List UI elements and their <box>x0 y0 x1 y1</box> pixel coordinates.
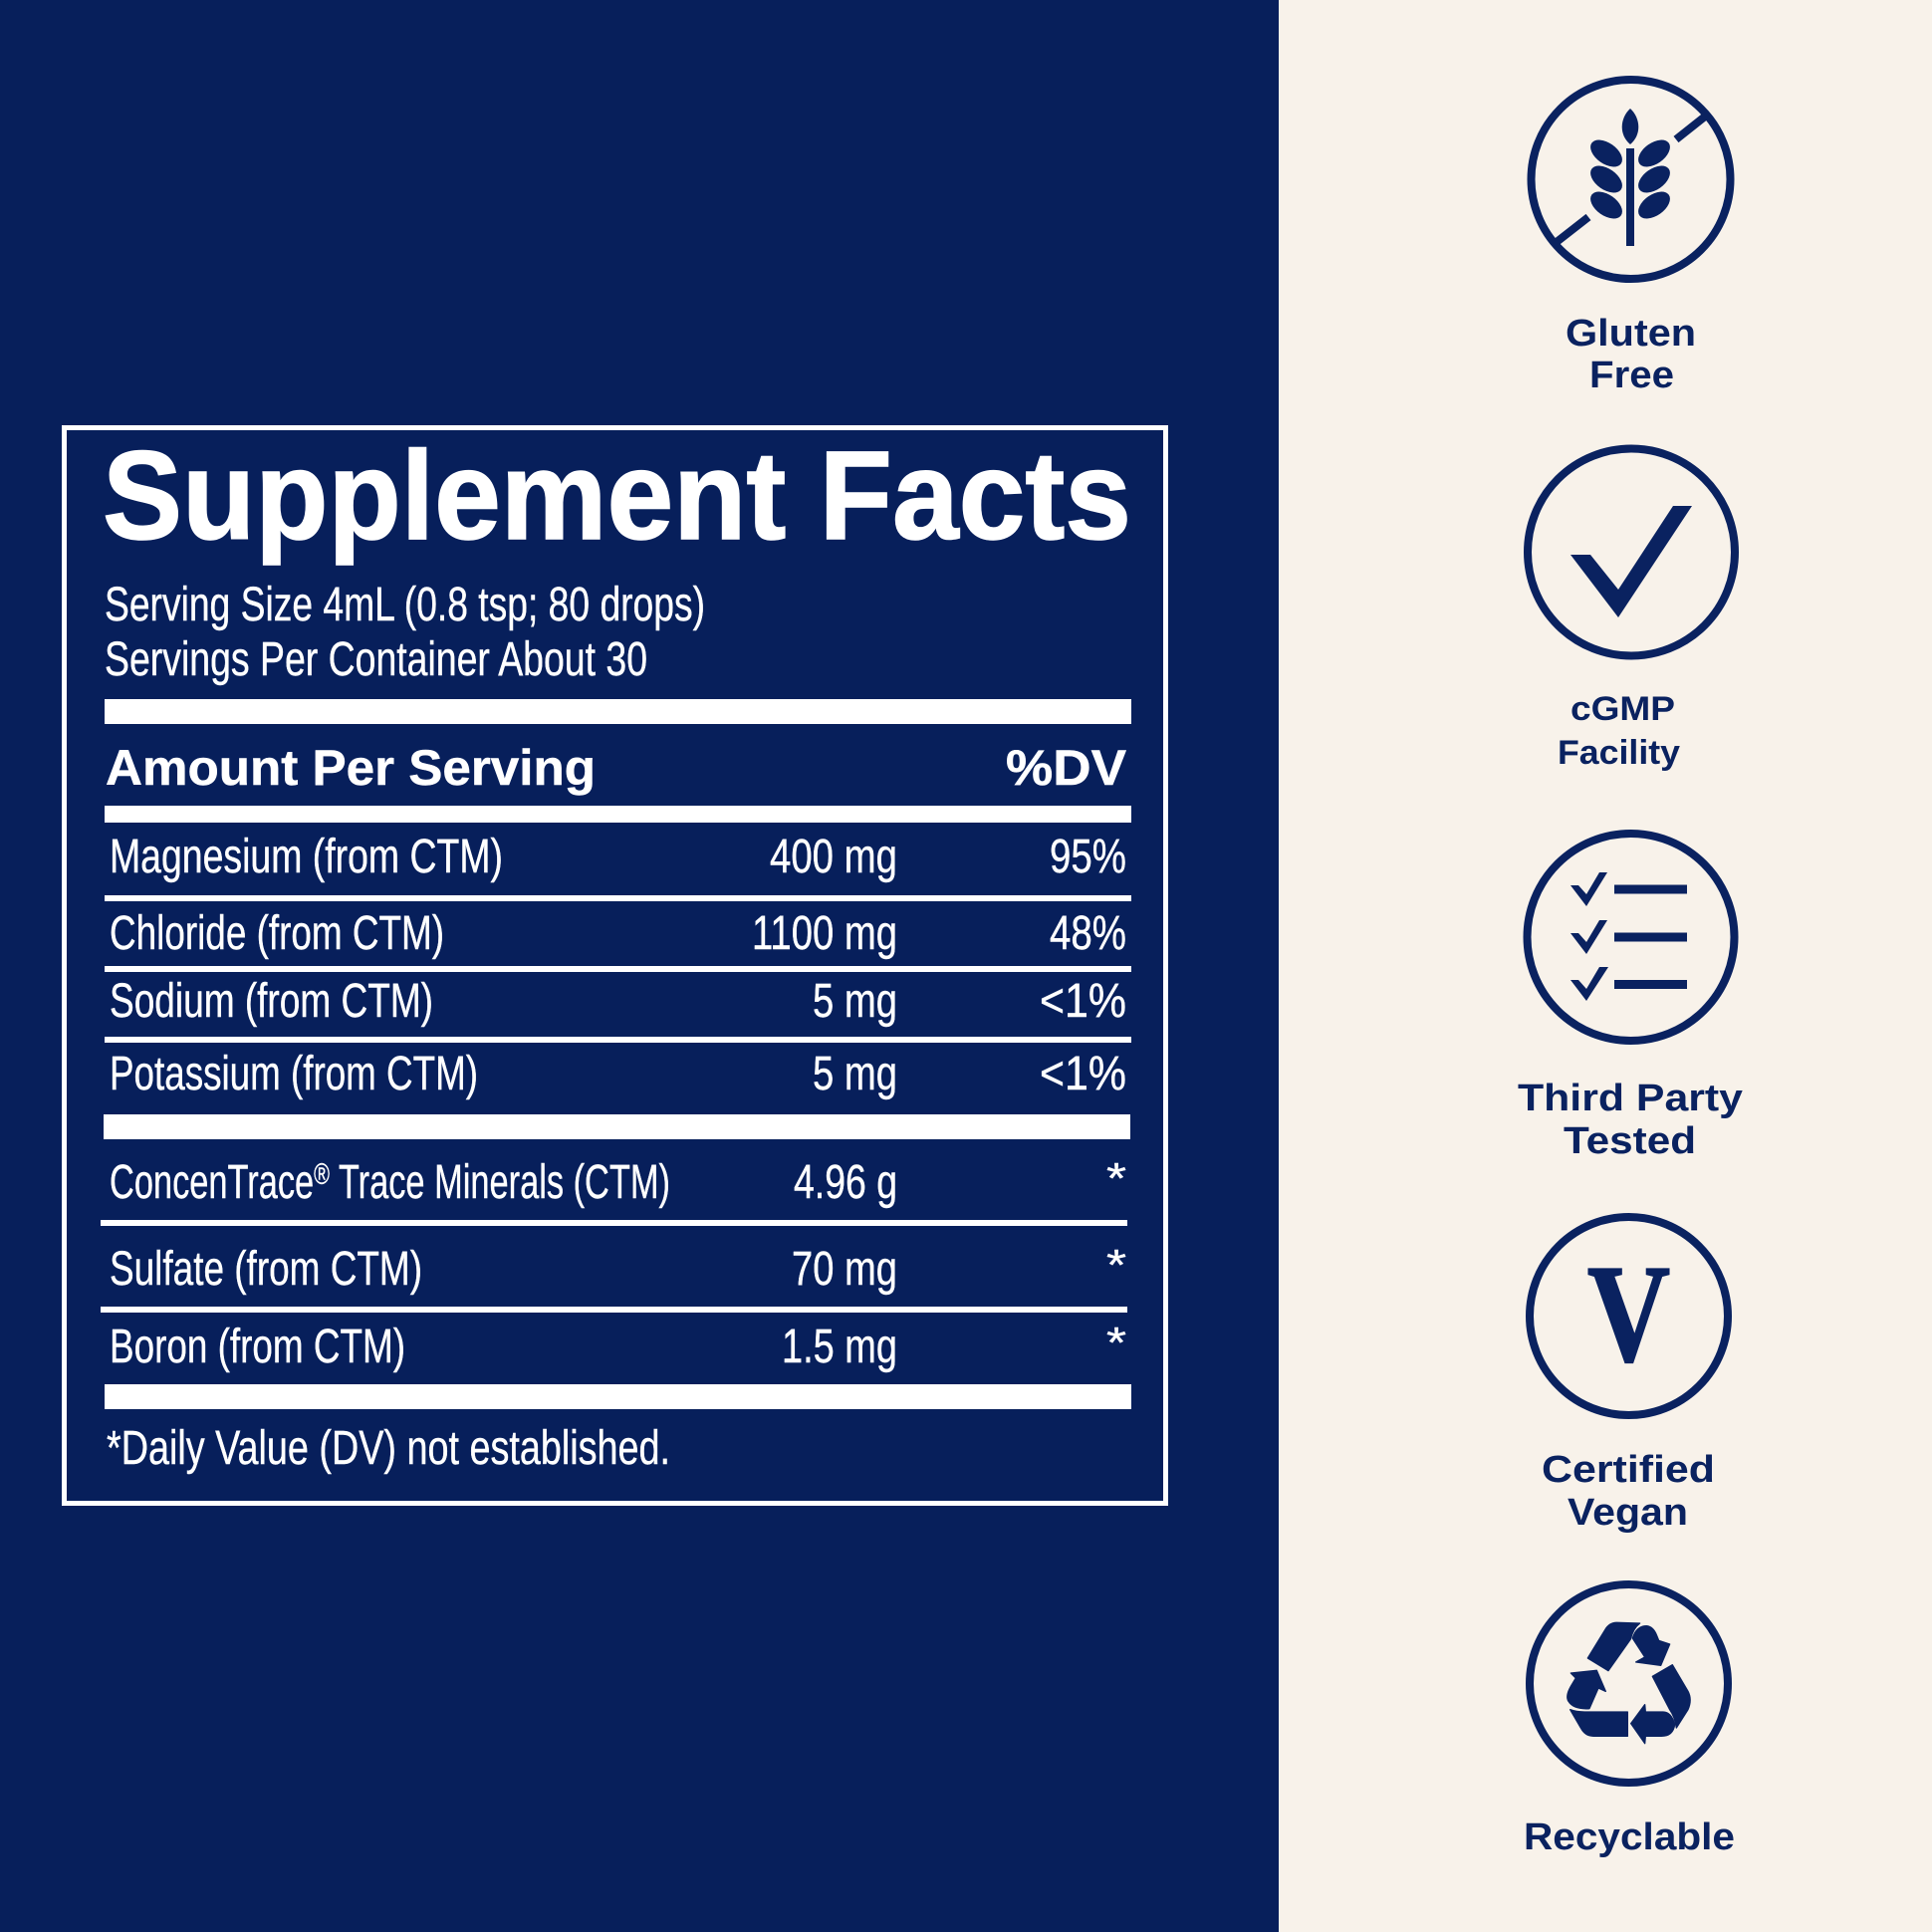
row: Potassium: <1% <box>1040 1048 1126 1100</box>
label: cGMP Facility <box>1558 690 1680 772</box>
row: ConcenTrace: * <box>1106 1154 1126 1203</box>
label: Recyclable: Recyclable <box>1524 1816 1735 1858</box>
panel: navy background <box>0 0 1279 1932</box>
column headings: %DV <box>1006 740 1127 796</box>
row: Magnesium: 400 mg <box>770 831 897 883</box>
icon: recycling arrows <box>1530 1584 1728 1783</box>
row: Boron: Boron (from CTM) <box>110 1321 405 1373</box>
thick rule <box>105 699 1131 724</box>
icon: serif V: V <box>1587 1237 1670 1391</box>
row: Magnesium: 95% <box>1050 831 1126 883</box>
column headings <box>106 740 1127 796</box>
row: ConcenTrace: 4.96 g <box>794 1156 897 1209</box>
label: Certified Vegan: Vegan <box>1568 1492 1688 1534</box>
icon: checklist <box>1528 834 1735 1041</box>
icon: serif V <box>1530 1217 1728 1415</box>
label: Third Party Tested: Tested <box>1564 1120 1696 1162</box>
row: Chloride: 48% <box>1050 907 1126 960</box>
label: Gluten Free: Free <box>1589 355 1674 396</box>
row: Sodium <box>110 975 1126 1028</box>
badge: gluten free <box>1532 80 1731 396</box>
row: ConcenTrace: ® <box>314 1158 330 1191</box>
row: ConcenTrace: ConcenTrace <box>110 1156 394 1209</box>
row: Sulfate: Sulfate (from CTM) <box>110 1243 422 1296</box>
label: Gluten Free: Gluten <box>1566 313 1696 355</box>
badge: third party tested <box>1518 834 1743 1162</box>
row: Boron <box>110 1319 1126 1373</box>
label: Gluten Free <box>1566 313 1696 396</box>
row: Chloride: Chloride (from CTM) <box>110 907 444 960</box>
label: cGMP Facility: cGMP <box>1570 690 1675 728</box>
thick rule <box>104 1114 1130 1139</box>
row: ConcenTrace <box>110 1154 1126 1209</box>
row: Boron: * <box>1106 1319 1126 1367</box>
panel: cream background <box>1278 0 1932 1932</box>
label frame <box>64 428 1165 1504</box>
row: Magnesium <box>110 831 1126 883</box>
heading: Supplement Facts: Supplement Facts <box>103 425 1131 566</box>
footnote: *Daily Value (DV) not established. <box>107 1422 670 1475</box>
label: cGMP Facility: Facility <box>1558 734 1680 772</box>
row: Sodium: 5 mg <box>813 975 897 1028</box>
column headings: Amount Per Serving <box>106 740 596 796</box>
label: Certified Vegan: Certified <box>1542 1449 1715 1491</box>
row: Sodium: Sodium (from CTM) <box>110 975 433 1028</box>
row: Sodium: <1% <box>1040 975 1126 1028</box>
thick rule <box>105 1384 1131 1409</box>
row: Chloride: 1100 mg <box>752 907 897 960</box>
row: Magnesium: Magnesium (from CTM) <box>110 831 503 883</box>
row: Potassium <box>110 1048 1126 1100</box>
badge: recyclable <box>1524 1584 1735 1858</box>
text block: serving information <box>105 579 705 686</box>
label: Certified Vegan <box>1542 1449 1715 1534</box>
icon: check mark <box>1528 448 1735 655</box>
row: Chloride <box>110 907 1126 960</box>
row: Sulfate <box>110 1241 1126 1296</box>
label: Third Party Tested: Third Party <box>1518 1078 1743 1119</box>
text block: serving information: Serving Size 4mL (0.8 tsp; 80 drops) <box>105 579 705 631</box>
badge: certified vegan <box>1530 1217 1728 1534</box>
label: Third Party Tested <box>1518 1078 1743 1162</box>
row: Sulfate: * <box>1106 1241 1126 1290</box>
panel: supplement facts label <box>64 425 1165 1504</box>
row: Sulfate: 70 mg <box>792 1243 897 1296</box>
row: ConcenTrace: Trace Minerals (CTM) <box>330 1156 670 1209</box>
thick rule <box>105 806 1131 823</box>
icon: crossed-out wheat <box>1532 80 1731 279</box>
row: Boron: 1.5 mg <box>782 1321 897 1373</box>
row: Potassium: 5 mg <box>813 1048 897 1100</box>
badge: cGMP facility <box>1528 448 1735 772</box>
row: Potassium: Potassium (from CTM) <box>110 1048 478 1100</box>
text block: serving information: Servings Per Container About 30 <box>105 633 647 686</box>
